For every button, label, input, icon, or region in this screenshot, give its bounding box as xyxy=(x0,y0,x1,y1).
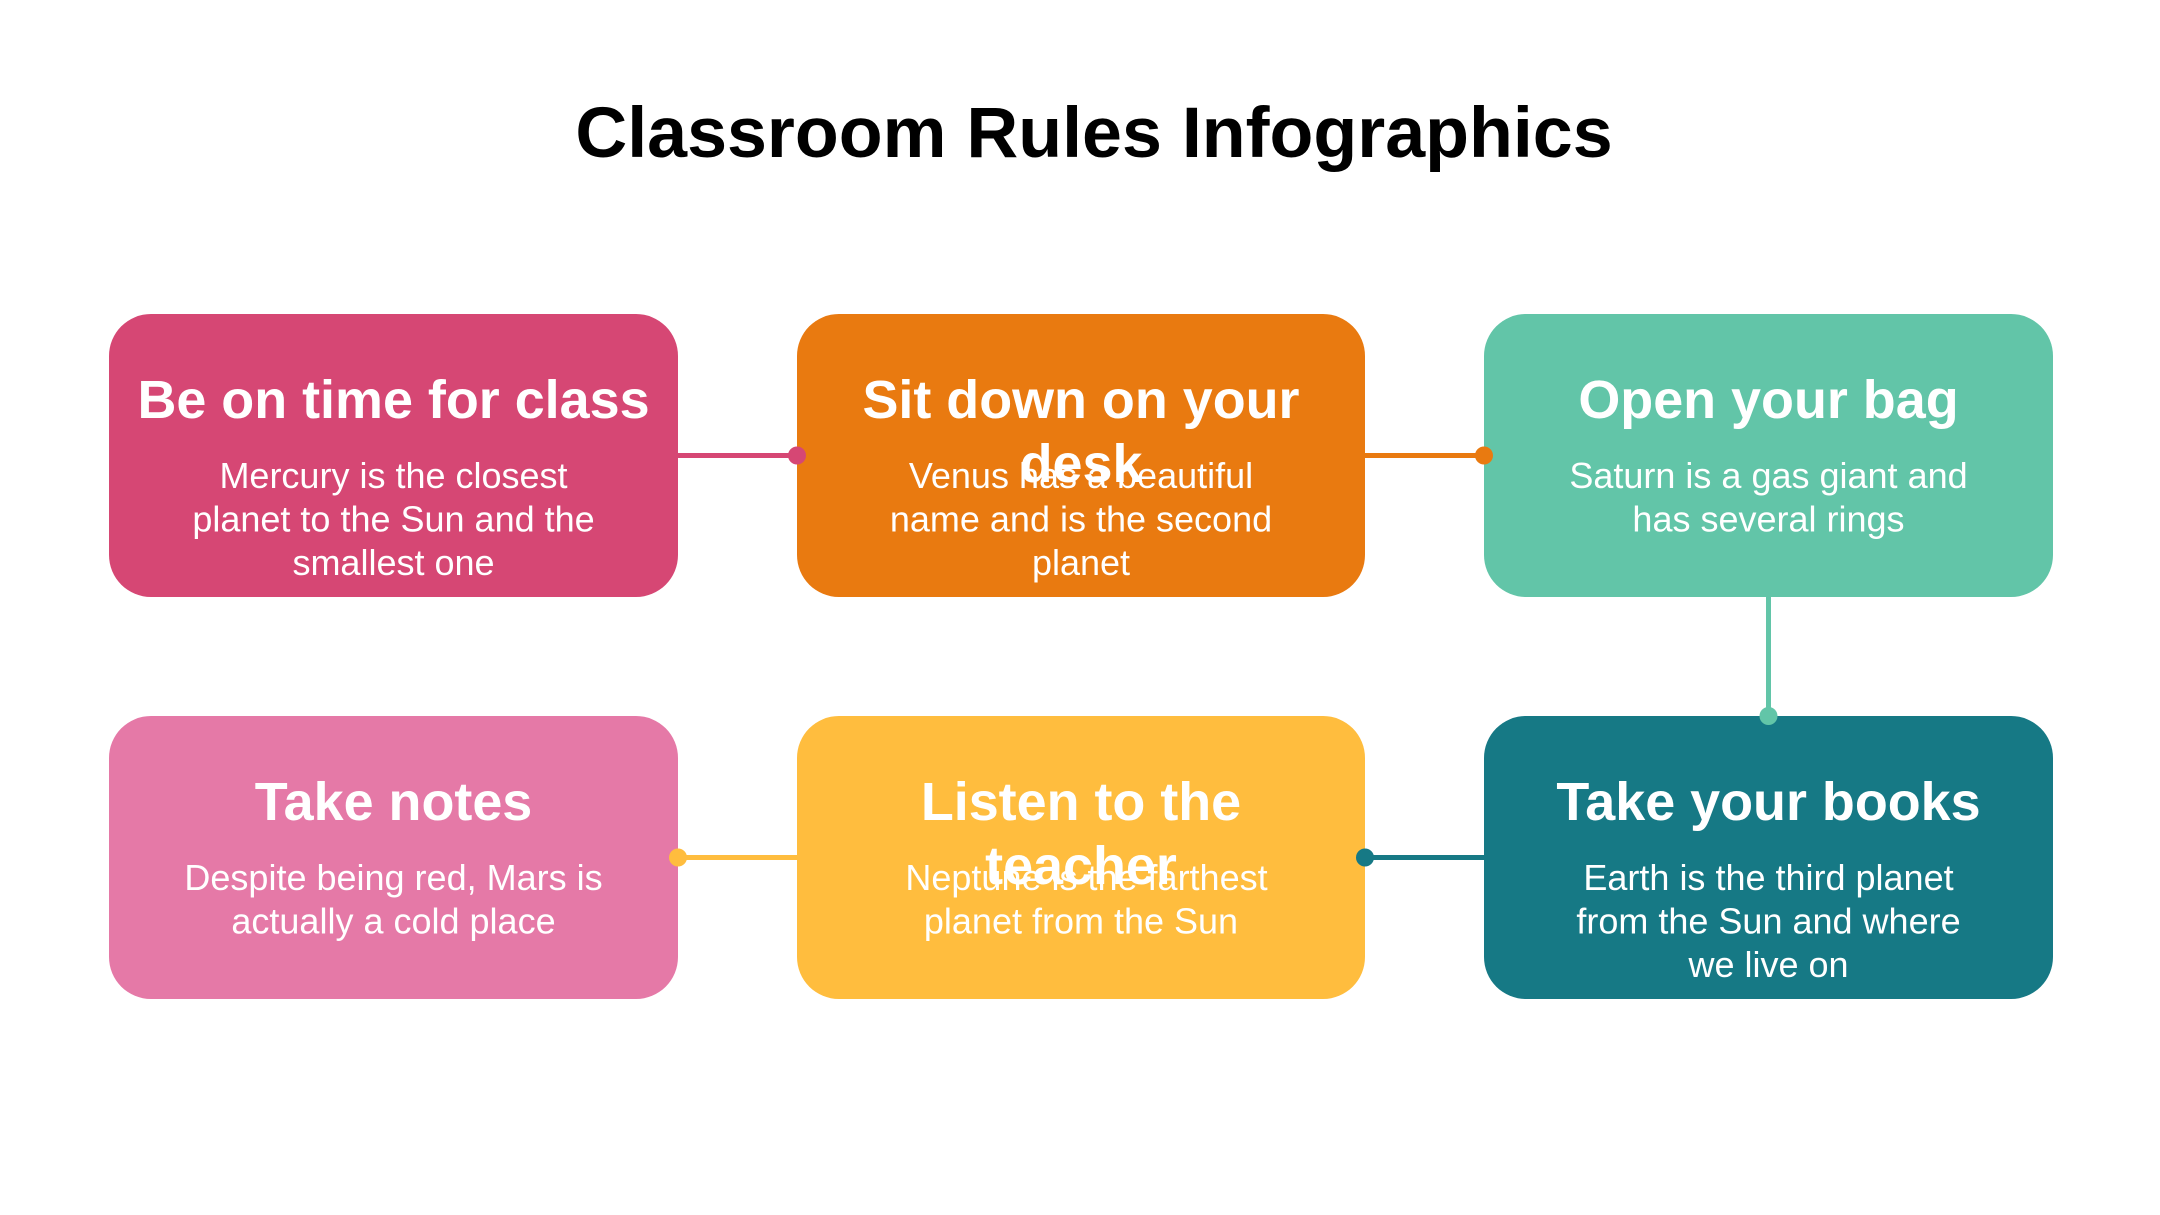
text: mars: actually a cold place xyxy=(231,900,556,942)
text: neptune: planet from the Sun xyxy=(924,900,1238,942)
heading: sit down on your desk: Sit down on your xyxy=(862,370,1300,430)
arrow: yellow connector xyxy=(669,848,797,866)
heading: listen to the teacher: teacher xyxy=(985,836,1177,896)
text: mercury: Mercury is the closest xyxy=(219,455,568,496)
text: saturn xyxy=(1569,455,1968,540)
text: venus xyxy=(890,455,1272,583)
arrow: orange connector xyxy=(1365,446,1493,464)
text: earth: Earth is the third planet xyxy=(1583,857,1954,898)
heading: take notes: Take notes xyxy=(255,772,532,832)
text: mercury: smallest one xyxy=(292,542,495,583)
heading: sit down on your desk: desk xyxy=(1020,434,1143,494)
text: earth xyxy=(1576,857,1961,985)
panel: listen to the teacher xyxy=(797,716,1365,999)
text: venus: name and is the second xyxy=(890,498,1272,540)
text: mars xyxy=(184,857,603,942)
heading: take your books: Take your books xyxy=(1556,772,1981,832)
text: venus: planet xyxy=(1032,542,1130,583)
heading: open your bag: Open your bag xyxy=(1578,370,1959,430)
heading: be on time for class: Be on time for class xyxy=(137,370,650,430)
text: mercury: planet to the Sun and the xyxy=(192,498,595,540)
text: mercury xyxy=(192,455,595,583)
heading: listen to the teacher: Listen to the xyxy=(921,772,1241,832)
arrow: green connector xyxy=(1760,597,1778,725)
title: Classroom Rules Infographics xyxy=(575,93,1613,173)
text: mars: Despite being red, Mars is xyxy=(184,857,603,898)
heading: listen to the teacher xyxy=(921,772,1241,896)
arrow: teal connector xyxy=(1356,848,1484,866)
text: neptune: Neptune is the farthest xyxy=(905,857,1268,898)
text: saturn: Saturn is a gas giant and xyxy=(1569,455,1968,496)
panel: take your books xyxy=(1484,716,2053,999)
text: earth: we live on xyxy=(1687,944,1849,985)
heading: sit down on your desk xyxy=(862,370,1300,494)
panel: be on time for class xyxy=(109,314,678,597)
text: neptune xyxy=(905,857,1268,942)
panel: take notes xyxy=(109,716,678,999)
arrow: pink connector xyxy=(678,446,806,464)
text: earth: from the Sun and where xyxy=(1576,900,1961,942)
text: venus: Venus has a beautiful xyxy=(909,455,1253,496)
text: saturn: has several rings xyxy=(1632,498,1905,540)
panel: sit down on your desk xyxy=(797,314,1365,597)
panel: open your bag xyxy=(1484,314,2053,597)
